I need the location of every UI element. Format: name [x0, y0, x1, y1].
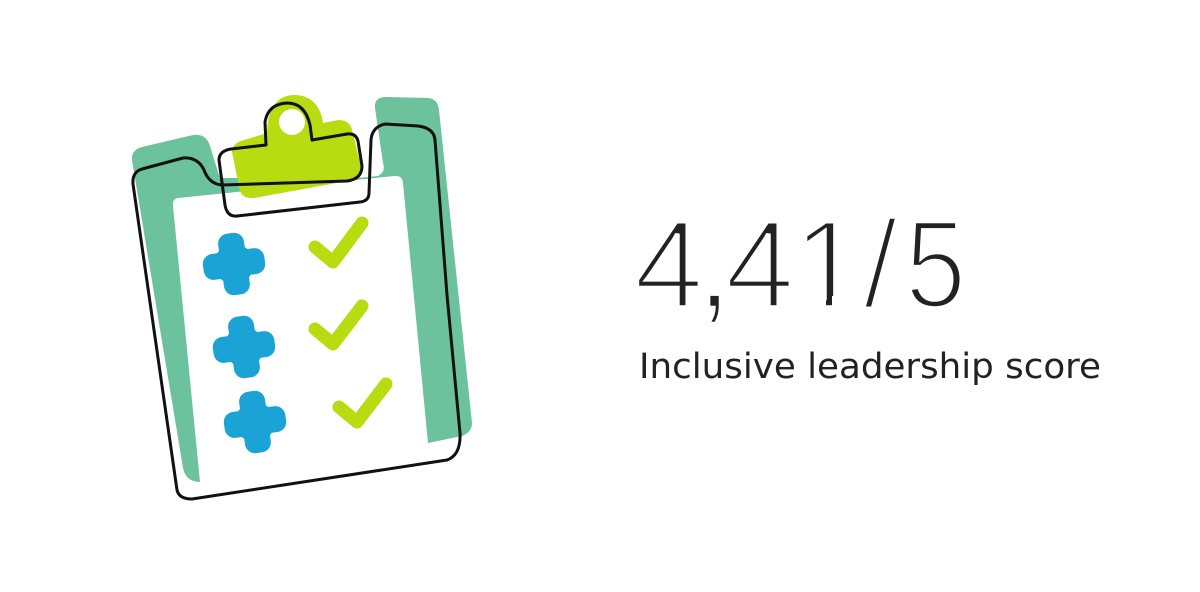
icon: check 2	[315, 306, 362, 344]
score label: Inclusive leadership score	[639, 347, 1101, 387]
score value: 5	[905, 194, 966, 334]
clipboard black outline	[133, 103, 460, 499]
icon: clipboard	[132, 95, 472, 499]
clip hole	[279, 109, 305, 135]
icon: cross 1	[199, 229, 269, 299]
clipboard green board	[132, 97, 472, 482]
score value: 4,41/	[634, 196, 898, 334]
icon: check 1	[315, 223, 362, 262]
clipboard clip fill	[232, 95, 361, 198]
icon: check 3	[339, 384, 386, 422]
icon: cross 2	[209, 312, 279, 382]
icon: cross 3	[220, 387, 290, 457]
